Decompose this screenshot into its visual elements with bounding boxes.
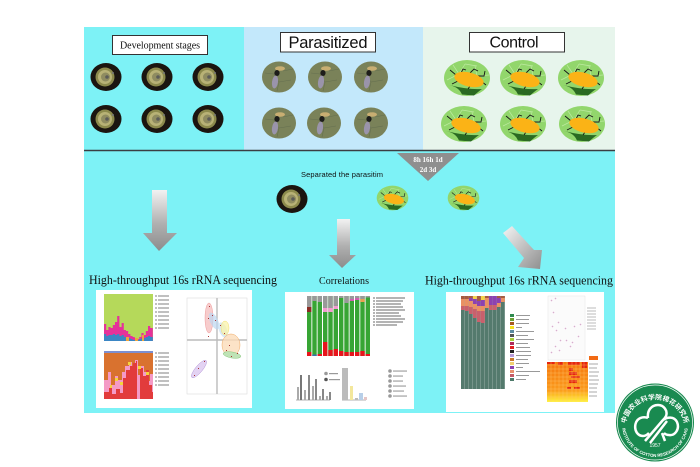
small legend B <box>388 369 407 398</box>
panel: middle charts <box>285 292 414 409</box>
heading: control: Control <box>490 34 538 52</box>
panel: control background <box>423 27 615 150</box>
stacked bar chart: relative abundance <box>307 296 370 356</box>
legend A <box>155 296 169 328</box>
heading: parasitized: Parasitized <box>288 34 368 52</box>
logo: Institute of Cotton Research of CAAS: INSTITUTE OF COTTON RESEARCH OF CAAS <box>622 428 688 457</box>
time points triangle <box>397 153 459 181</box>
small bar chart A <box>296 375 331 400</box>
panel: left charts <box>96 290 252 408</box>
heading: development stages <box>112 36 208 54</box>
legend: taxa <box>510 314 540 381</box>
time points triangle: 2d 3d <box>420 166 436 174</box>
time points triangle: 8h 16h 1d <box>413 156 443 164</box>
logo: Institute of Cotton Research of CAAS: 1957 <box>649 443 661 449</box>
panel: development stages background <box>84 27 245 150</box>
legend B <box>155 353 169 385</box>
stacked bar chart B <box>104 351 153 399</box>
icon: aphid sample two <box>448 186 479 210</box>
scatter plot B <box>548 296 596 360</box>
heading: left sequencing: High-throughput 16s rRNA sequencing <box>89 272 277 287</box>
text: separated the parasitim: Separated the parasitim <box>301 170 383 179</box>
small legend A <box>324 372 340 381</box>
logo: Institute of Cotton Research of CAAS <box>616 384 694 462</box>
logo: Institute of Cotton Research of CAAS: 中国农业科学院棉花研究所 <box>620 394 690 423</box>
heading: right sequencing: High-throughput 16s rRNA sequencing <box>425 272 613 288</box>
panel: right charts <box>446 292 604 412</box>
arrow: left <box>143 190 177 251</box>
small bar chart B <box>342 368 367 400</box>
icons: development stage specimens <box>90 63 224 133</box>
icon: separated parasitoid <box>276 185 308 213</box>
heading: correlations: Correlations <box>319 276 369 287</box>
PCoA scatter plot C <box>187 298 247 394</box>
arrow: middle <box>329 219 356 268</box>
legend: relative abundance <box>373 298 405 325</box>
heatmap C <box>547 356 599 402</box>
stacked bar chart: relative abundance <box>461 296 505 389</box>
panel: parasitized background <box>244 27 424 150</box>
icons: parasitized aphids <box>262 62 388 138</box>
icon: aphid sample one <box>377 186 408 210</box>
arrow: right <box>503 226 542 269</box>
panel: lower analysis background <box>84 151 615 413</box>
stacked bar chart A <box>104 294 153 341</box>
heading: control <box>470 32 564 52</box>
heading: development stages: Development stages <box>120 40 200 52</box>
icons: control aphids <box>441 60 605 142</box>
